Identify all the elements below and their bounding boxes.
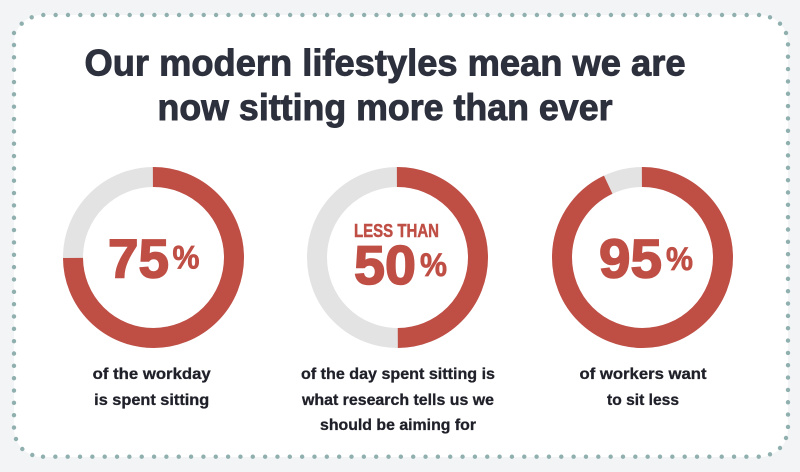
donut chart: less than 50% xyxy=(317,177,478,338)
label: less than: LESS THAN xyxy=(354,220,439,241)
caption: 50% xyxy=(301,366,495,434)
title: now sitting more than ever xyxy=(158,87,612,128)
caption: 75%: is spent sitting xyxy=(94,392,209,409)
value: 95%: 95 xyxy=(599,228,662,290)
value: 50%: 50 xyxy=(354,234,416,296)
caption: 95%: of workers want xyxy=(580,366,706,383)
donut chart: 95% xyxy=(562,177,723,338)
caption: 95% xyxy=(580,366,706,409)
caption: 75%: of the workday xyxy=(93,366,211,383)
caption: 95%: to sit less xyxy=(607,392,679,409)
caption: 50%: what research tells us we xyxy=(301,392,494,409)
title: Our modern lifestyles mean we are xyxy=(84,42,686,84)
value: 95%: % xyxy=(666,241,693,277)
caption: 50%: of the day spent sitting is xyxy=(301,366,495,383)
value: 50%: % xyxy=(420,247,447,283)
value: 75%: % xyxy=(172,240,200,276)
donut chart: 75% xyxy=(73,177,234,338)
caption: 50%: should be aiming for xyxy=(320,417,476,434)
title xyxy=(84,42,686,128)
caption: 75% xyxy=(93,366,211,409)
value: 75%: 75 xyxy=(108,228,169,290)
